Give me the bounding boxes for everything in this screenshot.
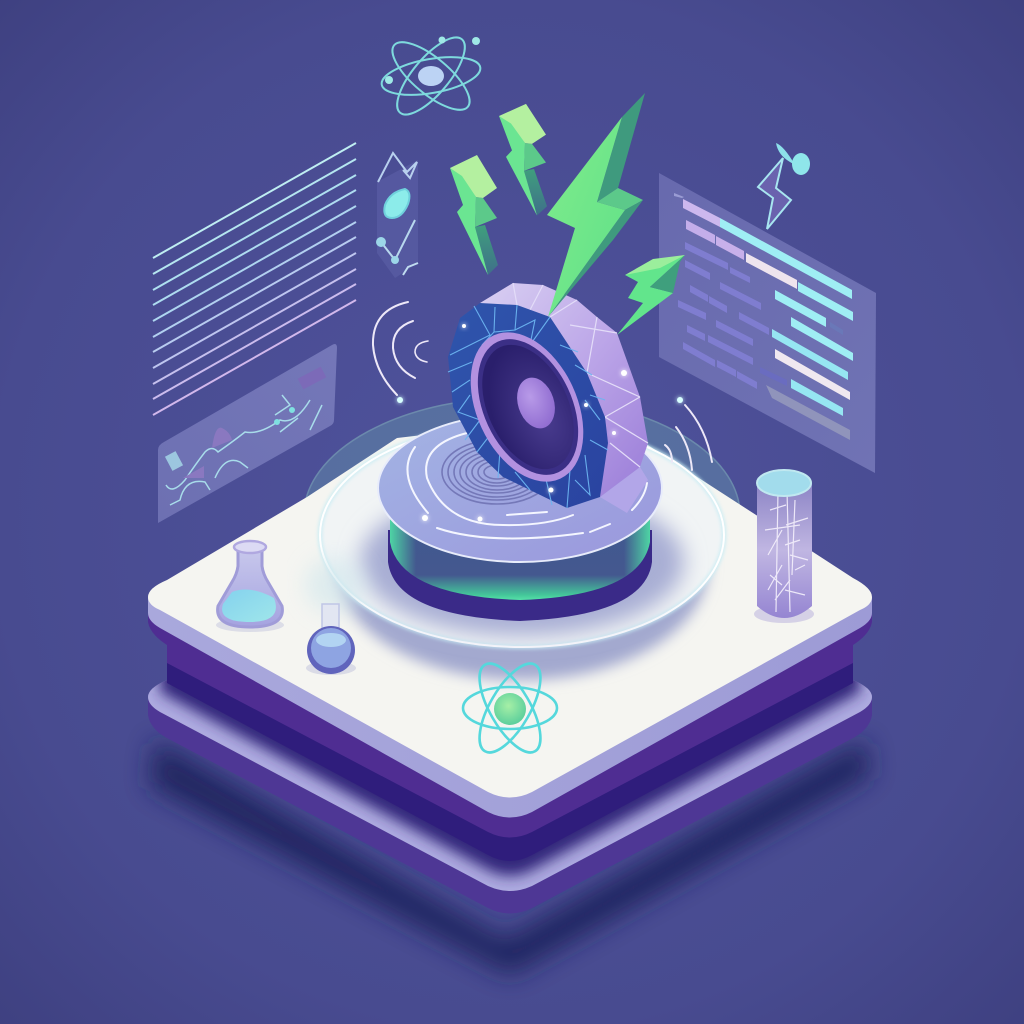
dark middle slab: [167, 650, 853, 861]
left line panel: [153, 143, 356, 415]
shadow on bottom slab: [160, 660, 860, 876]
translucent dome behind platform: [304, 397, 740, 633]
chart curves: [166, 395, 322, 505]
lavender edge: [148, 597, 872, 818]
green-blue body: [390, 500, 650, 600]
sound wave arcs right: [665, 397, 712, 470]
glass cylinder: [754, 470, 814, 623]
small bolt right: [617, 255, 685, 335]
table bars: [674, 193, 853, 440]
sound wave arcs left: [373, 302, 428, 403]
turntable: [378, 414, 662, 621]
atom icon top: [379, 28, 483, 124]
upper purple slab: [148, 600, 872, 838]
small vertical panel with glyphs: [376, 153, 418, 278]
bottom slab side: [148, 700, 872, 914]
foot shadow: [600, 467, 648, 513]
flask: conical: [216, 541, 284, 632]
cone: [464, 330, 592, 484]
music note icon: [758, 143, 810, 229]
small bolt left: [450, 155, 498, 275]
halo around turntable: [305, 423, 724, 680]
disc arcs: [407, 433, 647, 538]
platform: stacked isometric base: [148, 425, 872, 914]
white top surface: [148, 425, 872, 798]
right text panel: [659, 173, 876, 473]
bottom slab top: [148, 680, 872, 891]
fingerprint rings: [442, 440, 552, 504]
flask: round: [306, 604, 356, 675]
atom icon on platform: [463, 655, 557, 761]
crescent shadow: [336, 452, 708, 680]
large bolt: [547, 93, 645, 317]
speaker side: [480, 283, 648, 497]
dust cap: [511, 373, 561, 433]
top disc: [378, 414, 662, 562]
cone rim: [448, 314, 606, 500]
small bolt top: [499, 104, 547, 216]
platform shadow: [150, 740, 870, 975]
left chart panel: [158, 344, 337, 523]
speaker: [448, 283, 648, 513]
purple base ring: [388, 530, 652, 621]
speaker blue face: [448, 303, 608, 508]
lightning bolts: [450, 93, 685, 335]
